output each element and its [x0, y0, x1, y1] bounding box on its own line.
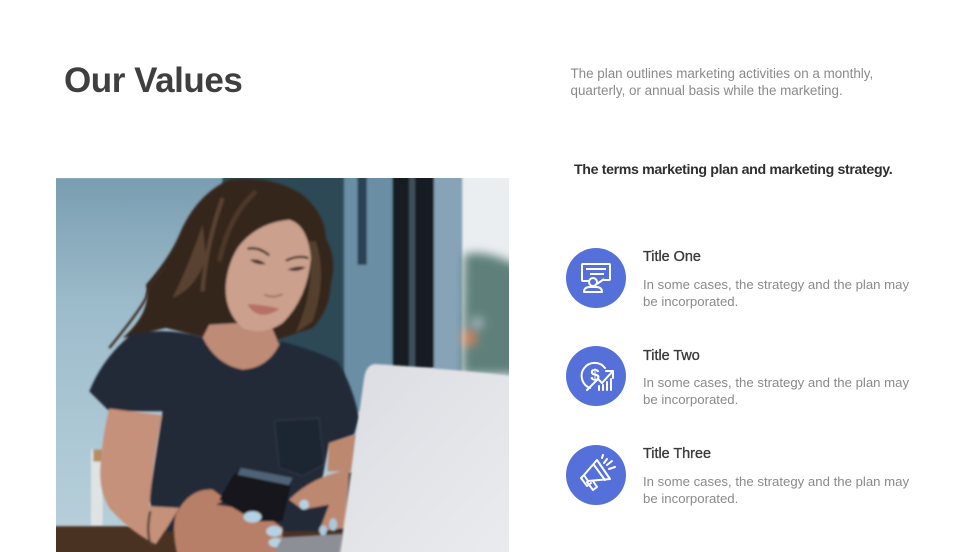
left arm [100, 409, 179, 545]
pocket [274, 418, 324, 476]
icon: megaphone [566, 445, 626, 505]
icon: dollar growth chart [566, 346, 626, 406]
description: be incorporated. [643, 491, 738, 506]
description [643, 474, 909, 506]
photo: woman working on a laptop [56, 178, 509, 552]
keyboard [269, 534, 342, 552]
heading: Title One [643, 248, 701, 264]
description: In some cases, the strategy and the plan may [643, 375, 909, 390]
nails [244, 511, 262, 523]
description: be incorporated. [643, 392, 738, 407]
intro text: quarterly, or annual basis while the marketing. [570, 83, 843, 98]
phone [219, 468, 292, 521]
description [643, 375, 909, 407]
description [643, 277, 909, 309]
wavy hair strand [109, 268, 166, 348]
face [226, 220, 311, 331]
heading: Title Two [643, 348, 700, 364]
icon: dollar growth chart: $ [590, 366, 600, 384]
intro text: The plan outlines marketing activities on a monthly, [570, 66, 873, 81]
right arm [327, 435, 356, 471]
neck and chest [203, 321, 279, 370]
chair [91, 450, 103, 526]
hair back [123, 179, 333, 341]
title: Our Values [64, 61, 242, 100]
description: In some cases, the strategy and the plan may [643, 474, 909, 489]
description: be incorporated. [643, 294, 738, 309]
item: Title Three [566, 445, 909, 506]
hand [174, 489, 282, 552]
description: In some cases, the strategy and the plan may [643, 277, 909, 292]
icon: presentation screen [566, 248, 626, 308]
shirt [89, 331, 359, 531]
laptop [338, 364, 522, 552]
table [46, 526, 356, 552]
item: Title One [566, 248, 909, 309]
subheading: The terms marketing plan and marketing strategy. [574, 162, 892, 178]
heading: Title Three [643, 446, 711, 462]
item: Title Two [566, 346, 909, 407]
intro text [570, 66, 873, 98]
